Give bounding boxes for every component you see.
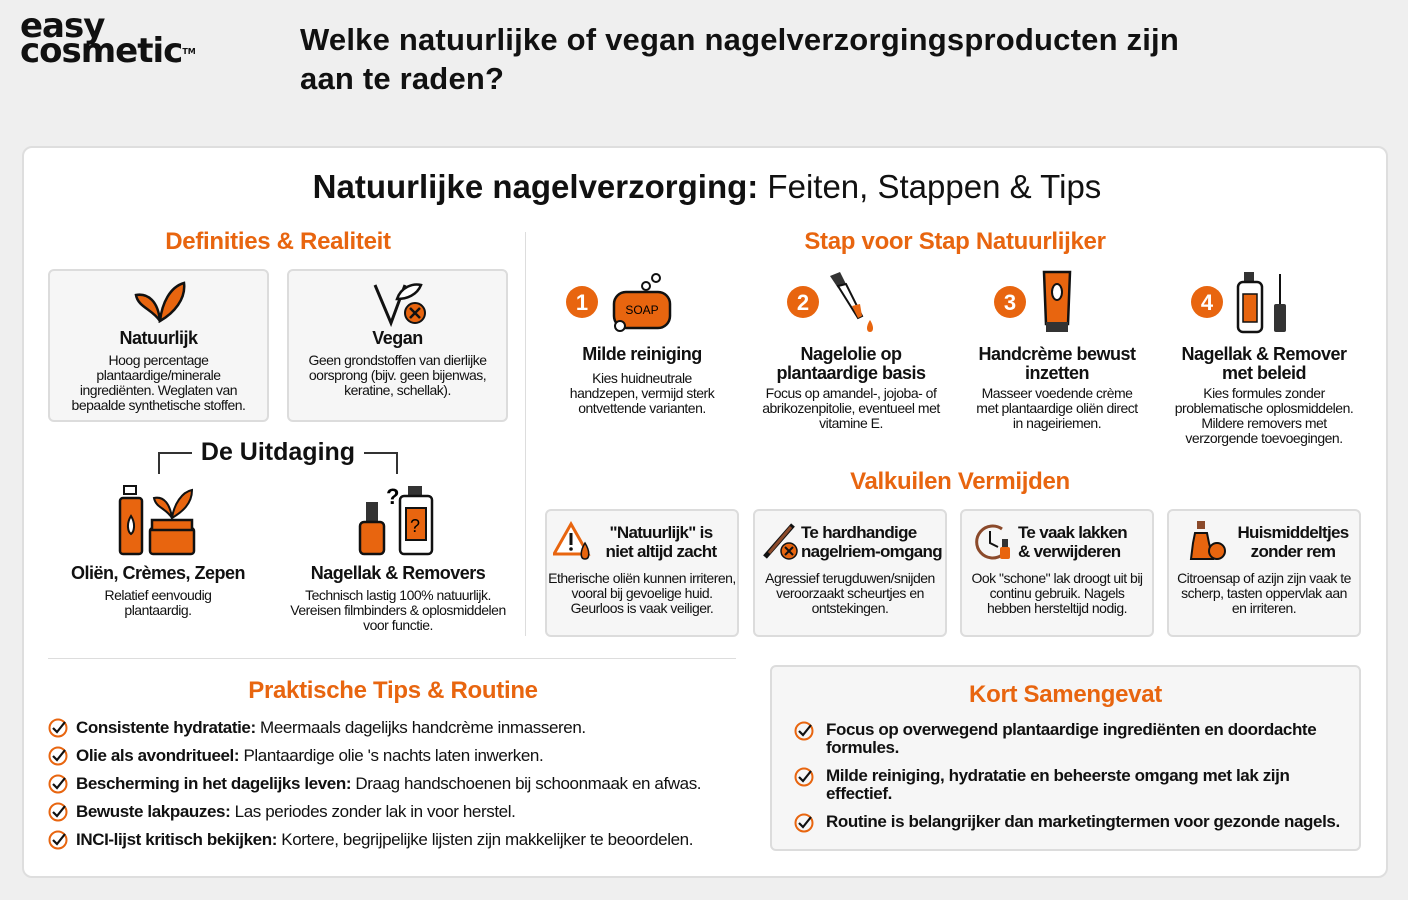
- step 2: Nagelolie op: [800, 344, 902, 364]
- heading: Stap voor Stap: Stap voor Stap Natuurlijker: [804, 228, 1106, 255]
- step 2: [762, 272, 940, 431]
- pitfall 3: Te vaak lakken: [1018, 523, 1127, 542]
- step 3: inzetten: [1025, 363, 1089, 383]
- page title: Welke natuurlijke of vegan nagelverzorgingsproducten zijn: [300, 22, 1179, 57]
- heading: Valkuilen Vermijden: Valkuilen Vermijden: [850, 468, 1070, 495]
- pitfall 2: [753, 509, 947, 637]
- step 1: Kies huidneutrale handzepen, vermijd sterk ontvettende varianten.: [570, 370, 714, 416]
- icon: number 3 and tube: 3: [1004, 290, 1016, 315]
- card title: Natuurlijke nagelverzorging: Feiten, Stappen & Tips: [313, 168, 1101, 205]
- icon: number 4 and bottles: 4: [1201, 290, 1214, 315]
- icon: bottle and citrus: [1190, 521, 1226, 560]
- tips list: INCI-lijst kritisch bekijken: Kortere, begrijpelijke lijsten zijn makkelijker te beoordelen.: [76, 830, 693, 849]
- step 2: plantaardige basis: [776, 363, 926, 383]
- tips list: Consistente hydratatie: Meermaals dagelijks handcrème inmasseren.: [76, 718, 586, 737]
- pitfall 1: "Natuurlijk" is: [610, 523, 712, 542]
- icon: leaves: [134, 281, 186, 323]
- icon: V with cross: [374, 283, 426, 327]
- panel: Natuurlijk: Hoog percentage plantaardige/minerale ingrediënten. Weglaten van bepaalde synthetische stoffen.: [72, 352, 245, 413]
- icon: number 1 and soap: SOAP: [625, 303, 659, 317]
- page title: aan te raden?: [300, 61, 504, 96]
- summary points: [794, 720, 1340, 832]
- tips list: Bescherming in het dagelijks leven: Draag handschoenen bij schoonmaak en afwas.: [76, 774, 701, 793]
- pitfall 1: [545, 509, 739, 637]
- icon: cuticle tool: [763, 523, 798, 560]
- pitfall 3: Ook "schone" lak droogt uit bij continu gebruik. Nagels hebben hersteltijd nodig.: [971, 570, 1143, 616]
- step 3: Handcrème bewust: [978, 344, 1136, 364]
- panel: Kort Samengevat: Kort Samengevat: [969, 681, 1162, 708]
- pitfall 2: Agressief terugduwen/snijden veroorzaakt scheurtjes en ontstekingen.: [765, 570, 935, 616]
- step 4: Nagellak & Remover: [1181, 344, 1347, 364]
- icon: number 2 and dropper: [787, 272, 873, 332]
- icon: warning: [553, 521, 590, 560]
- item: Nagellak removers: [290, 484, 506, 633]
- item: Olien cremes zepen: [71, 485, 245, 618]
- pitfall 4: [1167, 509, 1361, 637]
- tips list: Bewuste lakpauzes: Las periodes zonder lak in voor herstel.: [76, 802, 515, 821]
- step 1: [566, 273, 715, 416]
- heading: Definities: Definities & Realiteit: [165, 228, 391, 255]
- panel: Vegan: [287, 269, 508, 422]
- panel: Natuurlijk: Natuurlijk: [119, 328, 198, 348]
- icon: bottles and jar: [118, 485, 196, 556]
- pitfall 4: Huismiddeltjes: [1237, 523, 1349, 542]
- step 3: Masseer voedende crème met plantaardige oliën direct in nageiriemen.: [976, 385, 1138, 431]
- icon: polish and remover: ?: [386, 484, 399, 509]
- tips list: Olie als avondritueel: Plantaardige olie 's nachts laten inwerken.: [76, 746, 543, 765]
- summary points: Routine is belangrijker dan marketingtermen voor gezonde nagels.: [826, 812, 1340, 831]
- logo: [20, 6, 196, 71]
- item: Nagellak removers: Technisch lastig 100% natuurlijk. Vereisen filmbinders & oplosmiddelen voor functie.: [290, 587, 506, 633]
- item: Olien cremes zepen: Relatief eenvoudig plantaardig.: [104, 587, 211, 618]
- pitfall 4: zonder rem: [1251, 542, 1335, 561]
- icon: polish and remover: [358, 484, 434, 556]
- heading: De Uitdaging: De Uitdaging: [201, 438, 355, 466]
- pitfall 2: nagelriem-omgang: [801, 542, 942, 561]
- item: Nagellak removers: Nagellak & Removers: [311, 563, 485, 583]
- logo: cosmeticTM: [20, 31, 196, 71]
- logo: easy: [20, 6, 104, 46]
- panel: Kort Samengevat: [770, 665, 1361, 851]
- icon: clock and polish: [975, 524, 1010, 560]
- icon: number 2 and dropper: 2: [797, 290, 809, 315]
- step 4: met beleid: [1222, 363, 1306, 383]
- step 3: [976, 270, 1138, 431]
- pitfall 4: Citroensap of azijn zijn vaak te scherp, tasten oppervlak aan en irriteren.: [1177, 570, 1351, 616]
- step 4: Kies formules zonder problematische oplosmiddelen. Mildere removers met verzorgende toevoegingen.: [1175, 385, 1353, 446]
- summary points: Milde reiniging, hydratatie en beheerste omgang met lak zijn effectief.: [826, 766, 1289, 803]
- step 2: Focus op amandel-, jojoba- of abrikozenpitolie, eventueel met vitamine E.: [762, 385, 940, 431]
- summary points: Focus op overwegend plantaardige ingrediënten en doordachte formules.: [826, 720, 1316, 757]
- panel: Natuurlijk: [48, 269, 269, 422]
- heading: Praktische Tips: Praktische Tips & Routine: [248, 677, 538, 704]
- pitfall 2: Te hardhandige: [801, 523, 917, 542]
- pitfall 3: [960, 509, 1154, 637]
- icon: number 1 and soap: [566, 273, 672, 332]
- item: Olien cremes zepen: Oliën, Crèmes, Zepen: [71, 563, 245, 583]
- icon: number 1 and soap: 1: [576, 290, 588, 315]
- heading: De Uitdaging: [158, 438, 398, 474]
- panel: Vegan: Vegan: [372, 328, 423, 348]
- pitfall 1: niet altijd zacht: [606, 542, 716, 561]
- icon: polish and remover: ?: [410, 516, 420, 536]
- step 4: [1175, 272, 1353, 446]
- tips list: [48, 718, 701, 850]
- icon: number 3 and tube: [994, 270, 1072, 332]
- pitfall 3: & verwijderen: [1018, 542, 1120, 561]
- pitfall 1: Etherische oliën kunnen irriteren, vooral bij gevoelige huid. Geurloos is vaak veiliger.: [548, 570, 736, 616]
- panel: Vegan: Geen grondstoffen van dierlijke oorsprong (bijv. geen bijenwas, keratine, schellak).: [308, 352, 487, 398]
- step 1: Milde reiniging: [582, 344, 702, 364]
- main card: [22, 146, 1388, 878]
- icon: number 4 and bottles: [1191, 272, 1286, 334]
- page title: [300, 22, 1179, 96]
